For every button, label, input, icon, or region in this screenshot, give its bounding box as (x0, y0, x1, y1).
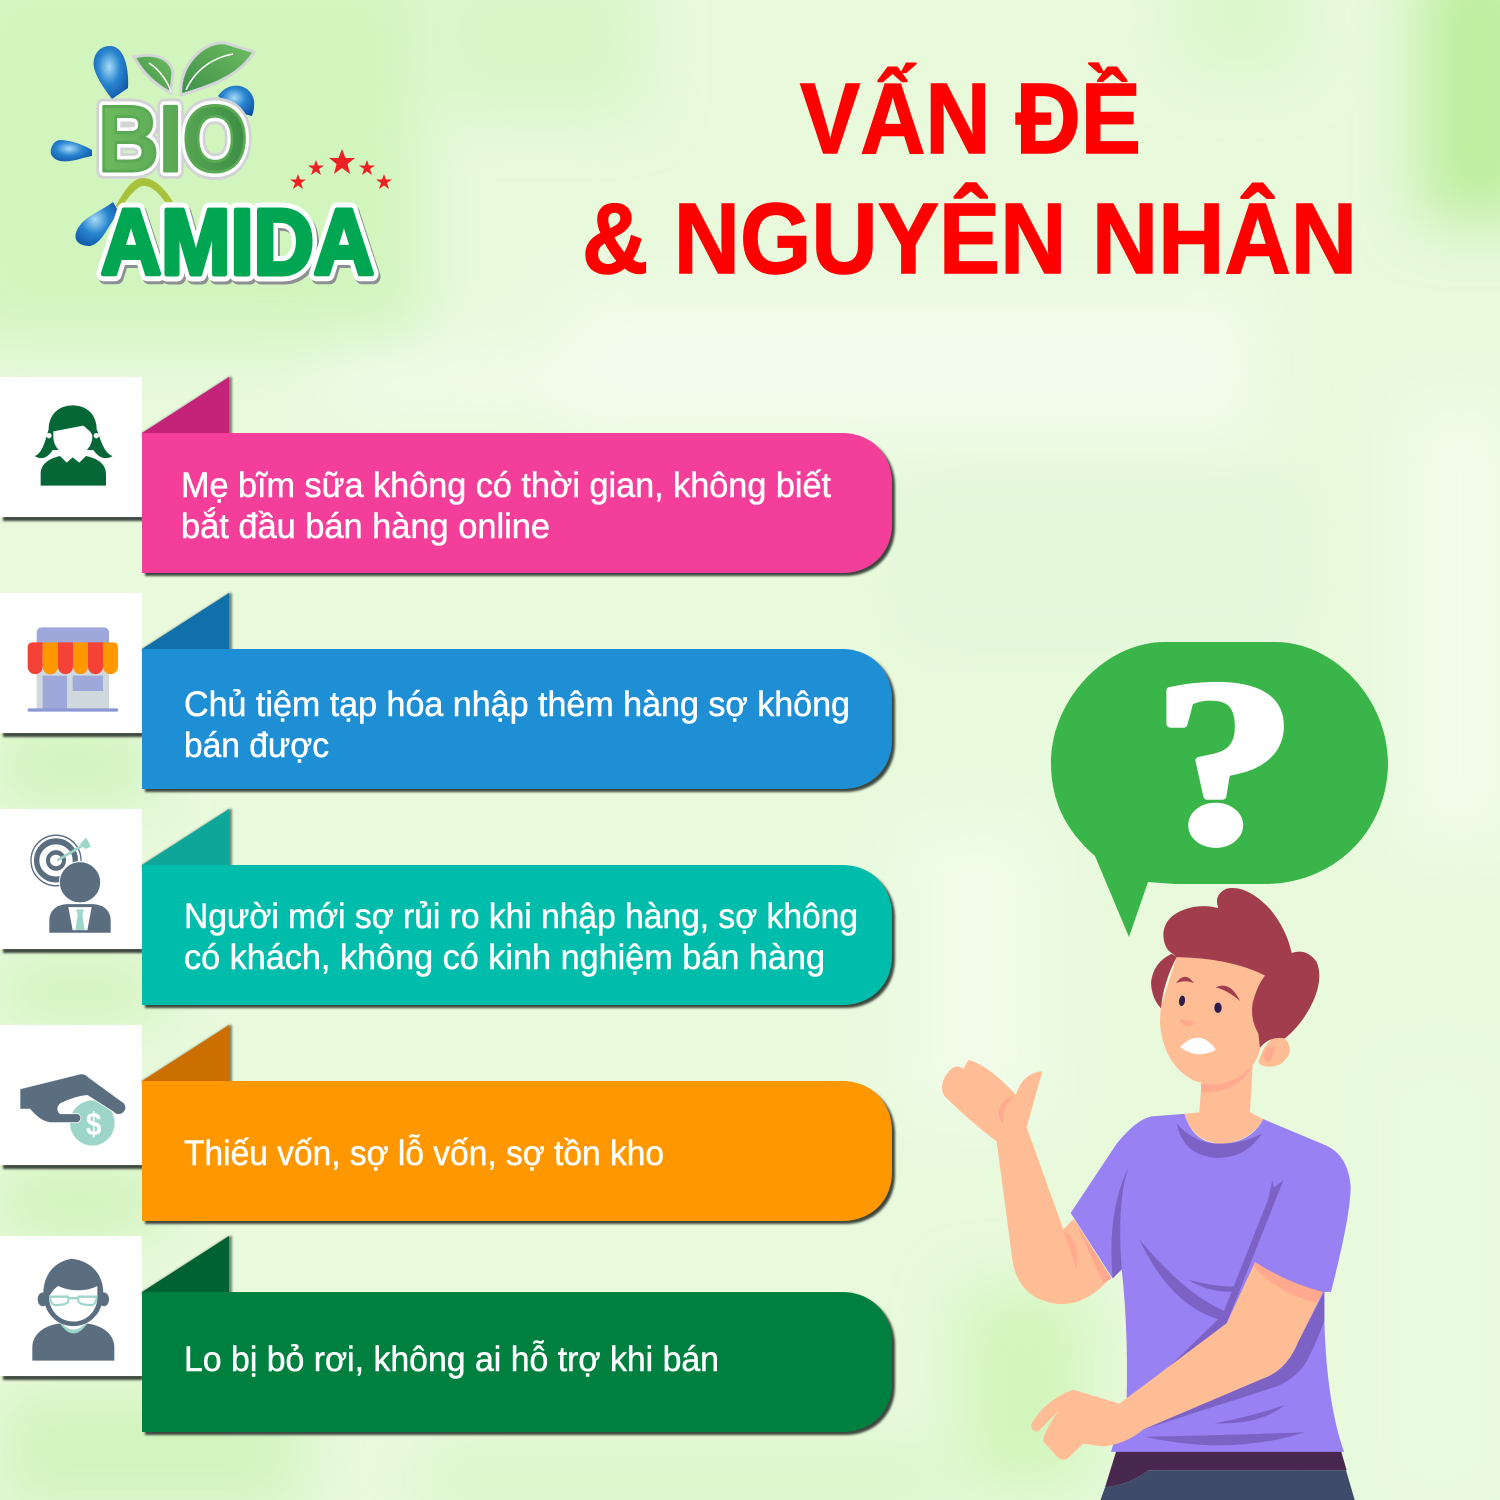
panel (142, 1292, 892, 1432)
panel shadow (145, 868, 895, 1008)
fold colour (142, 1236, 229, 1292)
fold colour (142, 809, 229, 865)
mouth (1180, 1038, 1216, 1054)
white icon card (0, 377, 142, 517)
right arm (1031, 1262, 1323, 1460)
brows (1176, 977, 1240, 1001)
fold colour (142, 593, 229, 649)
fold (142, 377, 232, 436)
white icon card (0, 1236, 142, 1376)
text line 2: có khách, không có kinh nghiệm bán hàng (184, 938, 825, 977)
text: Người mới sợ rủi ro khi nhập hàng, sợ không (184, 897, 858, 936)
fold (142, 809, 232, 868)
face (1160, 957, 1265, 1084)
logo: water drops (51, 46, 254, 246)
logo: BIO grey outline: BIO (98, 86, 248, 191)
text: Thiếu vốn, sợ lỗ vốn, sợ tồn kho (184, 1134, 664, 1173)
card shadow (3, 1375, 143, 1380)
logo: leaves (134, 43, 254, 95)
hair (1151, 888, 1319, 1048)
icon: hand with coin (20, 1074, 126, 1146)
eyes (1178, 995, 1222, 1013)
icon: hand with coin: $ (86, 1107, 102, 1143)
logo: stars (290, 149, 392, 189)
shirt (1071, 1114, 1351, 1452)
white icon card (0, 809, 142, 949)
card shadow (3, 516, 143, 521)
logo: AMIDA shadow: AMIDA (103, 193, 376, 297)
left arm (942, 1060, 1110, 1304)
text: Lo bị bỏ rơi, không ai hỗ trợ khi bán (184, 1340, 719, 1379)
icon: target person (31, 835, 111, 933)
title (582, 62, 1357, 295)
item 5: green ribbon (0, 1236, 895, 1435)
card shadow (3, 732, 143, 737)
logo: stem arc (116, 178, 173, 210)
pants (1090, 1450, 1363, 1500)
card shadow (3, 948, 143, 953)
fold colour (142, 1025, 229, 1081)
question mark: ? (1153, 631, 1297, 892)
panel (142, 433, 892, 573)
sleeve shadow (1253, 1262, 1323, 1303)
shirt folds (1111, 1123, 1324, 1445)
speech bubble with question mark (1051, 631, 1388, 937)
logo: BIO wordmark: BIO (98, 86, 248, 191)
bubble (1051, 642, 1388, 937)
panel shadow (145, 652, 895, 792)
ear (1258, 1036, 1290, 1067)
title line 2: & NGUYÊN NHÂN (582, 182, 1357, 295)
fold colour (142, 377, 229, 433)
logo: Bio Amida (51, 43, 392, 297)
logo: AMIDA wordmark: AMIDA (101, 190, 374, 294)
fold (142, 1025, 232, 1084)
white icon card (0, 1025, 142, 1165)
logo: leaf veins (149, 54, 233, 92)
panel shadow (145, 436, 895, 576)
nose (1179, 1018, 1197, 1026)
icon: shop (28, 627, 118, 712)
text line 2: bán được (184, 726, 329, 765)
panel shadow (145, 1084, 895, 1224)
icon: man with glasses (32, 1259, 114, 1361)
text: Mẹ bĩm sữa không có thời gian, không biết (181, 466, 831, 505)
item 1: pink ribbon (0, 377, 895, 576)
icon: woman (35, 405, 113, 486)
item 4: orange ribbon (0, 1025, 895, 1224)
text line 2: bắt đầu bán hàng online (181, 507, 550, 546)
item 2: blue ribbon (0, 593, 895, 792)
panel (142, 649, 892, 789)
logo: BIO white outline: BIO (98, 86, 248, 191)
white icon card (0, 593, 142, 733)
fold (142, 1236, 232, 1295)
logo: AMIDA white outline: AMIDA (101, 190, 374, 294)
person (942, 888, 1363, 1500)
item 3: teal ribbon (0, 809, 895, 1008)
text: Chủ tiệm tạp hóa nhập thêm hàng sợ không (184, 685, 850, 724)
ear inner (1263, 1046, 1275, 1062)
panel shadow (145, 1295, 895, 1435)
panel (142, 865, 892, 1005)
panel (142, 1081, 892, 1221)
fold (142, 593, 232, 652)
chin shadow (1201, 1066, 1253, 1093)
card shadow (3, 1164, 143, 1169)
arm shading (998, 1096, 1112, 1283)
title line 1: VẤN ĐỀ (800, 62, 1141, 175)
neck (1184, 1064, 1263, 1144)
